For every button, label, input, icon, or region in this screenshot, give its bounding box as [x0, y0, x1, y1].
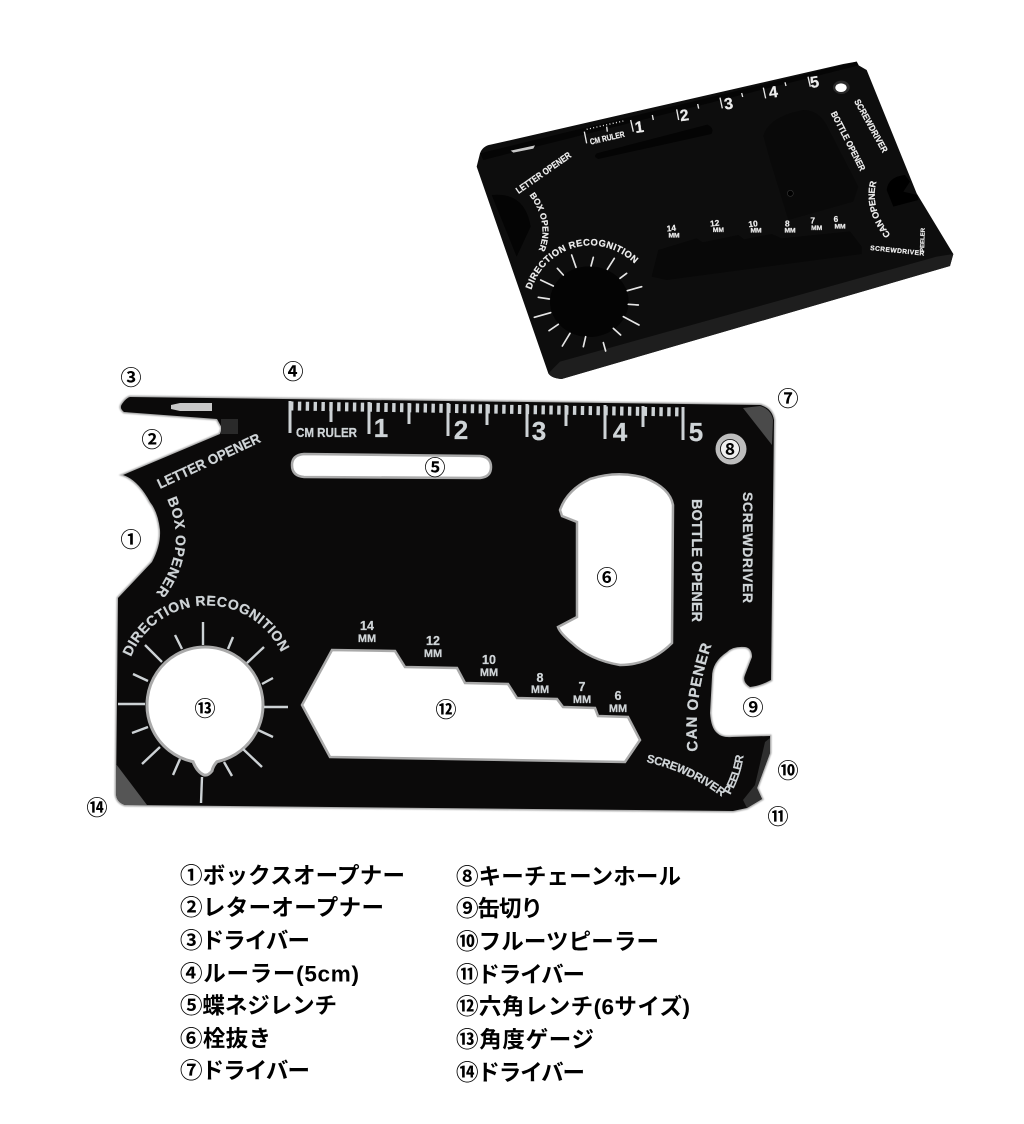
hex wrench hole	[302, 650, 640, 762]
direction circle hole	[147, 647, 263, 775]
photo text labels	[514, 97, 927, 290]
ruler numbers: 4	[613, 417, 628, 447]
legend: left column: ⑦ドライバー	[180, 1058, 310, 1084]
photo text labels: SCREWDRIVER	[852, 97, 890, 155]
wrench size labels: 14	[360, 619, 374, 633]
ruler numbers: 5	[689, 417, 703, 447]
photo wrench sizes: MM	[811, 225, 823, 232]
lower bevel edge	[548, 254, 953, 379]
panel: product photo of card tool	[476, 62, 954, 379]
callout numbers on diagram: ③	[120, 367, 142, 390]
wrench size labels: 6	[615, 689, 622, 703]
callout numbers on diagram: ⑤	[424, 457, 446, 480]
bottom right dark bevel: peeler	[743, 738, 770, 808]
photo wrench sizes: 14	[666, 223, 677, 233]
photo text labels: CM RULER	[589, 129, 626, 147]
panel: flat card tool diagram	[114, 394, 776, 814]
slot hole	[595, 125, 713, 159]
photo text labels: CAN OPENER	[868, 181, 890, 238]
ruler numbers: 1	[374, 413, 388, 443]
card text labels: CAN OPENER	[686, 643, 712, 752]
wrench size labels: MM	[358, 633, 376, 645]
can opener notch	[887, 175, 918, 207]
callout numbers on diagram: ⑥	[596, 567, 618, 590]
wrench size labels	[358, 619, 627, 715]
key chain hole	[716, 434, 746, 464]
legend: left column: ④ルーラー(5cm)	[180, 962, 359, 986]
callout numbers on diagram: ⑨	[742, 697, 764, 720]
callout numbers on diagram: ④	[282, 361, 304, 384]
wrench size labels: MM	[480, 667, 498, 679]
ruler numbers: 3	[723, 95, 734, 114]
callout numbers on diagram: ①	[120, 529, 142, 552]
callout numbers on diagram: ⑩	[778, 760, 798, 783]
legend: left column: ②レターオープナー	[180, 896, 384, 920]
photo wrench sizes: 8	[785, 219, 790, 229]
photo text labels: SCREWDRIVER	[870, 245, 925, 258]
key hole	[833, 81, 850, 94]
photo wrench sizes: MM	[750, 228, 762, 235]
ruler numbers: 4	[768, 84, 779, 102]
bottle opener hole	[763, 110, 858, 220]
legend: right column: ⑨缶切り	[456, 896, 543, 922]
legend: left column: ①ボックスオープナー	[180, 864, 405, 888]
callout numbers on diagram: ⑬	[194, 698, 216, 721]
legend: right column: ⑬角度ゲージ	[456, 1028, 594, 1052]
card text labels: SCREWDRIVER	[646, 754, 725, 797]
bottom left bevel: screwdriver	[116, 764, 147, 805]
legend: left column: ⑥栓抜き	[180, 1026, 271, 1052]
ruler numbers	[374, 413, 703, 447]
legend: right column: ⑩フルーツピーラー	[456, 930, 659, 954]
screwdriver mark on prong	[171, 403, 212, 411]
card text labels: SCREWDRIVER	[740, 492, 756, 603]
card text labels: PEELER	[724, 755, 744, 794]
ruler numbers: 3	[532, 416, 546, 446]
photo text labels: PEELER	[920, 227, 927, 252]
photo text labels: LETTER OPENER	[514, 150, 573, 196]
callout numbers on diagram: ⑪	[768, 806, 788, 829]
photo text labels: BOTTLE OPENER	[829, 110, 868, 173]
ruler numbers: 5	[809, 74, 820, 92]
card text labels: LETTER OPENER	[155, 430, 263, 492]
bottle opener hole	[558, 474, 673, 665]
small dot hole	[787, 190, 793, 196]
legend: right column: ⑭ドライバー	[456, 1060, 585, 1086]
key hole opening	[835, 83, 847, 92]
slot hole	[292, 454, 491, 478]
card text labels: DIRECTION RECOGNITION	[122, 596, 290, 656]
card body in photo	[477, 62, 953, 379]
wrench size labels: 12	[426, 634, 440, 648]
direction hole	[550, 266, 629, 337]
callout numbers on diagram	[86, 361, 798, 829]
wrench size labels: MM	[609, 703, 627, 715]
photo wrench sizes: 10	[748, 218, 759, 229]
top right bevel: screwdriver	[743, 406, 773, 445]
legend: right column: ⑧キーチェーンホール	[456, 864, 681, 890]
card text labels	[122, 425, 756, 797]
callout numbers on diagram: ⑫	[436, 699, 456, 722]
photo wrench sizes: MM	[834, 223, 846, 230]
legend: left column: ⑤蝶ネジレンチ	[180, 994, 337, 1018]
callout numbers on diagram: ⑭	[86, 797, 108, 820]
legend: left column: ③ドライバー	[180, 928, 310, 954]
card text labels: BOX OPENER	[156, 496, 186, 597]
ruler ticks	[290, 401, 683, 440]
wrench size labels: MM	[424, 648, 442, 660]
box opener notch	[492, 195, 531, 257]
ruler ticks	[584, 77, 810, 143]
legend: right column: ⑪ドライバー	[456, 962, 585, 988]
card body	[116, 397, 774, 811]
direction ticks	[534, 255, 642, 351]
wrench size labels: 7	[579, 680, 586, 694]
callout numbers on diagram: ⑧	[720, 439, 740, 462]
ruler numbers: 1	[634, 119, 645, 137]
legend: left column	[180, 864, 405, 1084]
card edge shadow	[116, 397, 774, 811]
callout numbers on diagram: ⑦	[778, 388, 798, 411]
card text labels: BOTTLE OPENER	[688, 499, 704, 623]
photo wrench sizes: MM	[713, 227, 724, 234]
photo wrench sizes: 6	[834, 214, 839, 224]
legend: right column: ⑫六角レンチ(6サイズ)	[456, 994, 690, 1020]
legend: right column	[456, 864, 690, 1086]
photo wrench sizes: 7	[810, 216, 815, 226]
card text labels: CM RULER	[296, 425, 358, 440]
ruler numbers	[634, 74, 820, 137]
letter opener glint	[511, 145, 535, 153]
hex wrench hole	[652, 231, 862, 280]
angle gauge ticks	[118, 622, 288, 803]
photo text labels: BOX OPENER	[530, 192, 549, 252]
wrench size labels: 10	[482, 653, 496, 667]
ruler numbers: 2	[679, 107, 690, 125]
top lip	[480, 62, 859, 160]
letter opener blade detail	[221, 419, 238, 434]
wrench size labels: MM	[573, 694, 591, 706]
callout numbers on diagram: ②	[142, 429, 162, 452]
photo wrench sizes: MM	[784, 228, 796, 235]
ruler numbers: 2	[454, 415, 468, 445]
wrench size labels: MM	[531, 684, 549, 696]
photo wrench sizes	[666, 214, 846, 239]
key chain hole opening	[721, 440, 739, 458]
photo text labels: DIRECTION RECOGNITION	[525, 238, 639, 290]
wrench size labels: 8	[537, 671, 544, 685]
photo wrench sizes: 12	[710, 218, 720, 228]
photo wrench sizes: MM	[668, 232, 680, 239]
